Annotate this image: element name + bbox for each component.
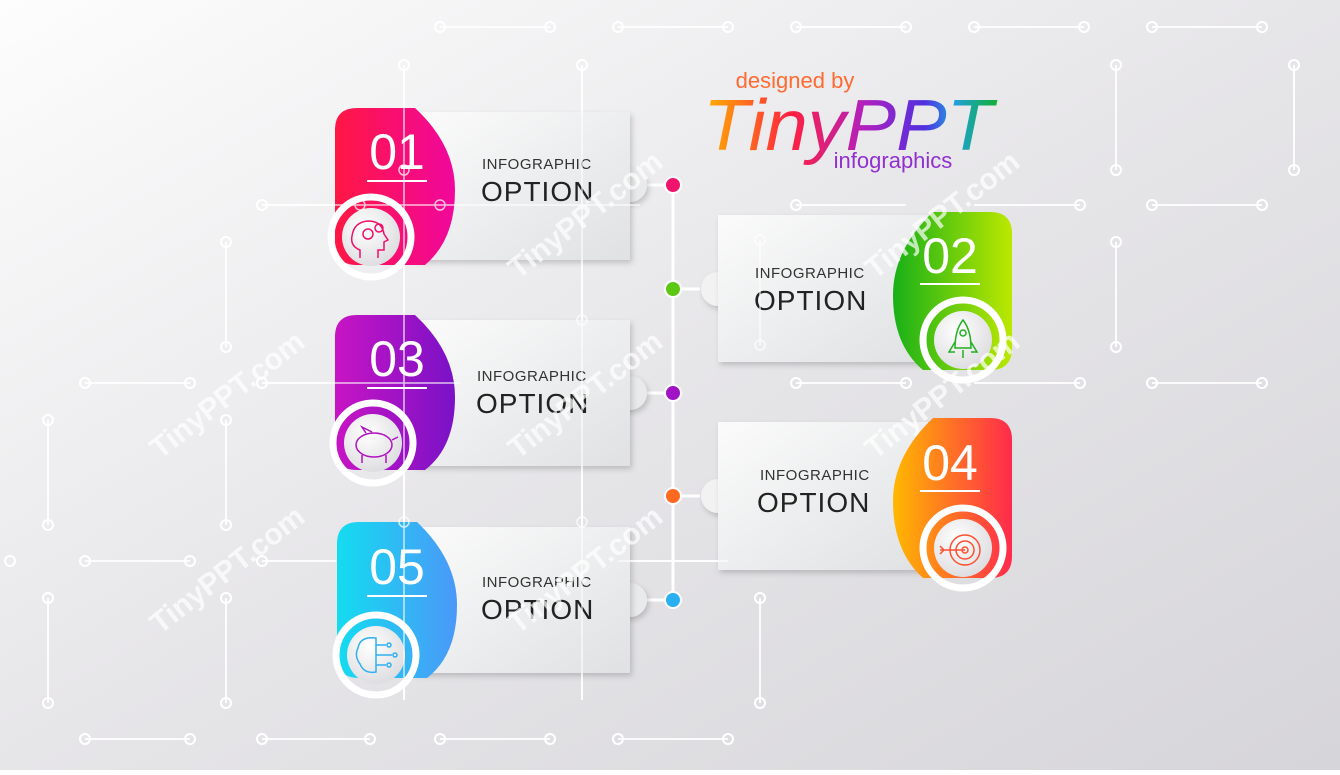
card 02: INFOGRAPHIC [755, 265, 865, 282]
card 02: 02 [922, 228, 978, 284]
card 02: OPTION [754, 285, 867, 316]
card 02 [665, 212, 1012, 380]
card 01: 01 [369, 124, 425, 180]
card 05: 05 [369, 539, 425, 595]
card 01 [331, 108, 681, 277]
card 04: INFOGRAPHIC [760, 467, 870, 484]
logo: designed by TinyPPT infographics: designed by [736, 68, 854, 93]
card 04: OPTION [757, 487, 870, 518]
watermarks: TinyPPT.com [502, 325, 669, 466]
watermarks: TinyPPT.com [502, 500, 669, 641]
vertical connector line [630, 185, 700, 600]
icon: rocket [949, 320, 977, 358]
icon: brain circuit [356, 638, 397, 672]
card 05: INFOGRAPHIC [482, 574, 592, 591]
watermarks: TinyPPT.com [144, 325, 311, 466]
card 05 [336, 522, 681, 695]
watermarks: TinyPPT.com [859, 325, 1026, 466]
logo: designed by TinyPPT infographics: infographics [834, 148, 952, 173]
icon: target with arrow [940, 535, 980, 565]
watermarks: TinyPPT.com [502, 145, 669, 286]
watermarks [144, 145, 1026, 641]
icon: head with gears [352, 221, 388, 258]
card 03: OPTION [476, 388, 589, 419]
card 04 [665, 418, 1012, 588]
logo: designed by TinyPPT infographics: TinyPPT [703, 86, 998, 166]
card 03: 03 [369, 331, 425, 387]
watermarks: TinyPPT.com [144, 500, 311, 641]
card 01: INFOGRAPHIC [482, 156, 592, 173]
card 05: OPTION [481, 594, 594, 625]
card 03: INFOGRAPHIC [477, 368, 587, 385]
watermarks: TinyPPT.com [859, 145, 1026, 286]
card 03 [333, 315, 681, 483]
card 01: OPTION [481, 176, 594, 207]
card 04: 04 [922, 435, 978, 491]
icon: piggy bank [356, 427, 398, 463]
